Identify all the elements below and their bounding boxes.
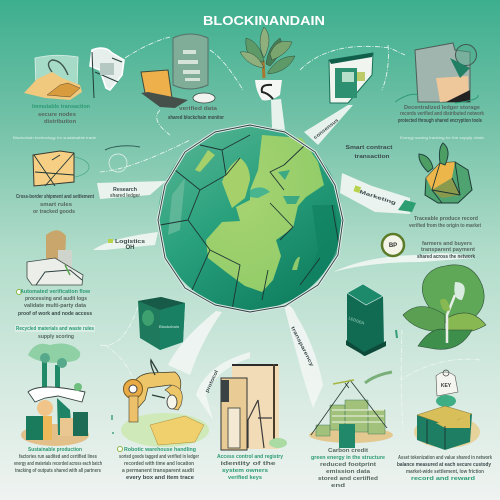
caption: robot arm: Robotic warehouse handling xyxy=(124,447,196,453)
caption: subheading xyxy=(15,325,95,340)
continents xyxy=(168,135,340,292)
ribbon label: tick: Logistics xyxy=(115,239,145,245)
title: BLOCKINANDAIN xyxy=(203,13,325,28)
icon: tag: KEY xyxy=(441,383,452,389)
caption: fruit: transparent payment xyxy=(421,247,475,253)
caption: envelope: or tracked goods xyxy=(33,209,75,215)
caption: robot arm xyxy=(118,446,199,481)
caption: treasure block xyxy=(397,455,492,482)
caption: tent: emission data xyxy=(326,469,370,475)
connector lines xyxy=(100,37,480,430)
icon: robot arm xyxy=(112,360,209,447)
caption: robot workshop xyxy=(14,447,102,474)
icon: green pillar box xyxy=(346,284,386,356)
caption: laptop: shared blockchain monitor xyxy=(168,115,224,121)
icon: laptop and server xyxy=(141,34,215,108)
heading strips: Energy saving tracking for the supply chain xyxy=(400,136,484,140)
caption: sealed package: distribution xyxy=(44,119,76,125)
caption: glass jar: protected through shared encryption tools xyxy=(398,118,482,124)
icon: seal: BP xyxy=(389,243,397,249)
icon: robot workshop xyxy=(21,344,89,446)
caption: tent: green energy in the structure xyxy=(311,455,385,461)
caption: machine xyxy=(16,289,92,317)
icon: tablet xyxy=(329,53,373,103)
icon: geometric fruit xyxy=(398,143,472,212)
caption: treasure block: balance measured at each secure custody xyxy=(397,462,491,468)
icon: green pillar box: LEDGER xyxy=(348,315,365,326)
caption: subheading: supply scoring xyxy=(38,334,74,340)
icon: green drop xyxy=(396,330,397,338)
icon: green tent with building xyxy=(309,372,393,448)
caption: robot arm: a permanent transparent audit xyxy=(122,468,194,474)
ribbon label: door: protocol xyxy=(204,369,220,394)
caption: fruit: Traceable produce record xyxy=(414,216,478,222)
caption: fruit: verified from the origin to market xyxy=(409,223,481,229)
ribbon label: envelope xyxy=(110,187,140,199)
icon: green cube xyxy=(138,297,185,350)
caption: ledger note: Smart contract xyxy=(346,145,393,151)
icon: glass jar xyxy=(395,43,478,103)
icon: green cube: Blockchain xyxy=(159,324,179,329)
ribbon label: lower: transparency xyxy=(289,326,315,368)
ribbon label: step xyxy=(353,185,397,207)
icon: potted plant xyxy=(240,27,295,100)
caption: glass jar: Decentralized ledger storage xyxy=(404,105,480,111)
caption: sealed package xyxy=(32,104,90,125)
caption: envelope: smart rules xyxy=(40,202,72,208)
icon: lamp device xyxy=(90,48,124,98)
caption: robot arm: every box and item trace xyxy=(126,475,194,481)
caption: treasure block: market-wide settlement, low friction xyxy=(406,469,484,475)
caption: machine: proof of work and node access xyxy=(18,311,92,317)
caption: tent: end xyxy=(331,483,345,489)
white ribbons linking globe to steps xyxy=(93,99,475,420)
caption: glass jar: records verified and distributed network xyxy=(400,111,484,117)
caption: sealed package: Immutable transaction xyxy=(32,104,90,110)
caption: robot workshop: factories run audited and certified lines xyxy=(19,454,97,460)
icon: treasure block xyxy=(414,395,480,450)
caption: machine: Automated verification flow xyxy=(20,289,90,295)
caption: door: identity of the xyxy=(220,461,276,467)
caption: door xyxy=(217,454,283,481)
ribbon label: envelope: Research xyxy=(113,187,137,193)
caption: machine: validate multi-party data xyxy=(24,303,86,309)
caption: tent: Carbon credit xyxy=(328,448,368,454)
icon: seal xyxy=(382,234,404,256)
caption: door: verified keys xyxy=(228,475,262,481)
caption: robot workshop: tracking of outputs shared with all partners xyxy=(15,468,101,474)
icon: wireframe ball xyxy=(109,154,127,172)
icon: door and figure xyxy=(221,364,287,450)
ribbon label: tick xyxy=(108,239,145,251)
ribbon label: step: Marketing xyxy=(359,189,397,207)
ribbon label: envelope: shared ledger xyxy=(110,193,140,199)
caption: machine: processing and audit logs xyxy=(25,296,87,302)
caption: laptop: verified data xyxy=(179,106,217,112)
globe network lines xyxy=(160,135,340,310)
caption: fruit xyxy=(409,216,481,260)
icon: large leaf plant xyxy=(403,265,486,349)
caption: tent: stored and certified xyxy=(318,476,378,482)
caption: laptop xyxy=(168,106,224,121)
ribbon label: tick: OH xyxy=(126,245,134,251)
caption: robot workshop: Sustainable production xyxy=(28,447,82,453)
icon: machine xyxy=(27,230,83,285)
caption: fruit: farmers and buyers xyxy=(422,241,472,247)
globe xyxy=(158,125,343,312)
caption: tent xyxy=(311,448,385,489)
caption: subheading: Recycled materials and waste rules xyxy=(16,326,94,332)
icon: tag xyxy=(436,370,458,396)
heading strips xyxy=(13,136,484,140)
icon: envelope xyxy=(33,151,89,186)
caption: fruit: shared across the network xyxy=(417,254,475,260)
caption: envelope: Cross-border shipment and settlement xyxy=(16,194,94,200)
caption: door: system owners xyxy=(222,468,268,474)
step: sealed package xyxy=(24,55,82,100)
caption: tent: reduced footprint xyxy=(320,462,376,468)
caption: robot arm: sorted goods tagged and verified in ledger xyxy=(119,454,199,460)
caption: treasure block: record and reward xyxy=(411,476,475,482)
caption: ledger note xyxy=(346,145,393,160)
caption: glass jar xyxy=(398,105,484,124)
caption: envelope xyxy=(16,194,94,215)
caption: sealed package: secure nodes xyxy=(38,112,76,118)
caption: ledger note: transaction xyxy=(354,154,390,160)
globe rim xyxy=(158,125,343,312)
caption: door: Access control and registry xyxy=(217,454,283,460)
heading strips: Blockchain technology for sustainable trade xyxy=(13,136,96,140)
caption: robot arm: recorded with time and location xyxy=(124,461,194,467)
caption: robot workshop: energy and materials recorded across each batch xyxy=(14,461,102,467)
ribbon label: consensus xyxy=(313,117,340,141)
